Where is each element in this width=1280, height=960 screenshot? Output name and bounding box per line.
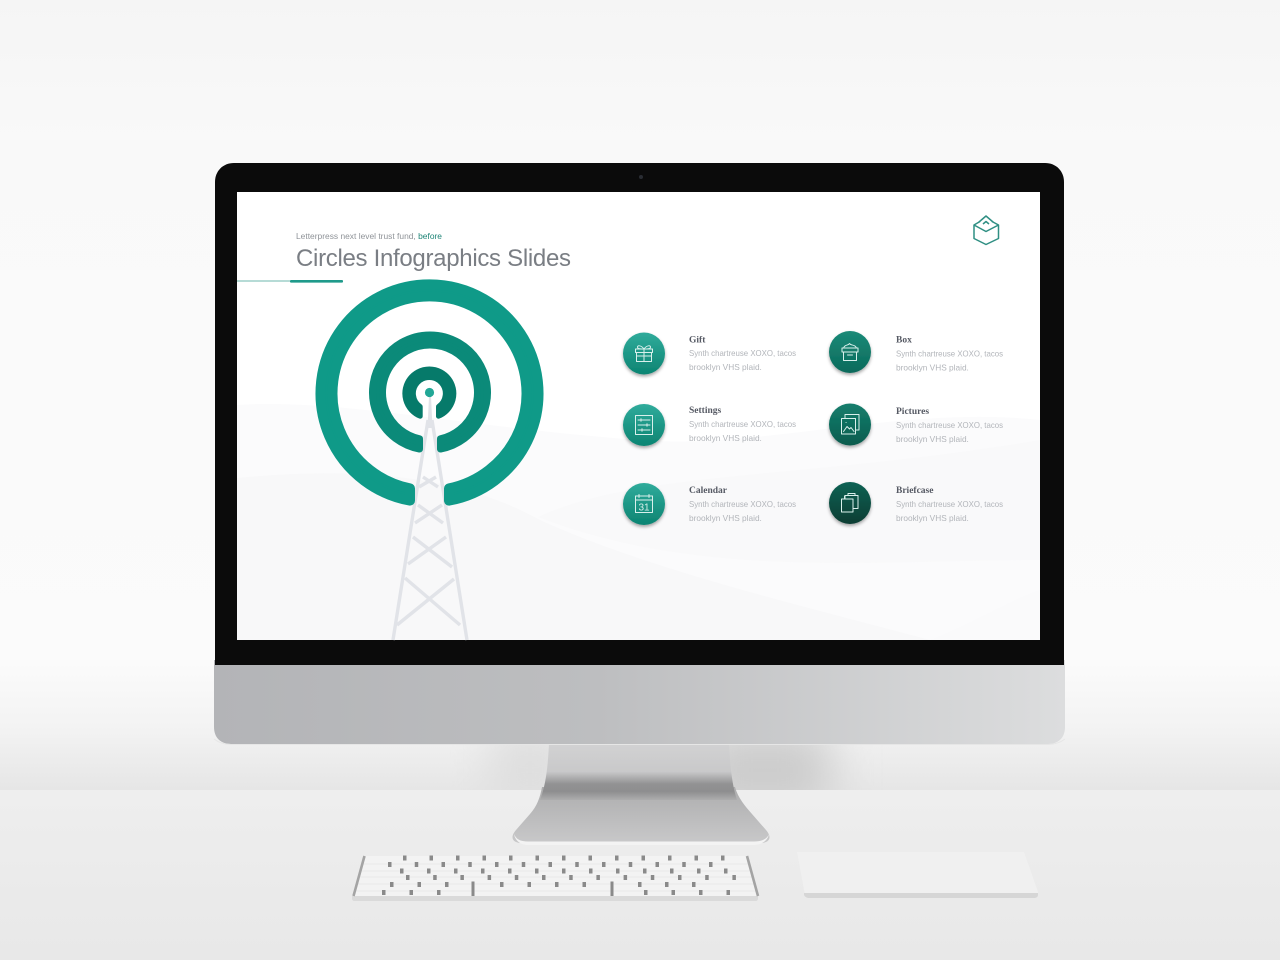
title underline — [237, 280, 343, 283]
settings description: Synth chartreuse XOXO, tacos — [689, 419, 796, 429]
pictures badge — [829, 404, 871, 446]
tower — [393, 396, 467, 640]
calendar description: Synth chartreuse XOXO, tacos — [689, 499, 796, 509]
calendar badge: 31 — [638, 502, 650, 514]
gift label: Gift — [689, 336, 706, 346]
item: box — [829, 331, 1003, 373]
soft wave background — [237, 404, 1040, 640]
outer ring — [320, 284, 538, 501]
shadow cast on the wall behind the stand — [496, 745, 843, 790]
desk surface — [0, 790, 1280, 960]
logo: cube icon — [974, 216, 998, 244]
briefcase badge — [829, 482, 871, 524]
silver chin — [214, 660, 1065, 744]
gift description: Synth chartreuse XOXO, tacos — [689, 348, 796, 358]
gift badge — [623, 332, 665, 374]
pictures description: Synth chartreuse XOXO, tacos — [896, 420, 1003, 430]
stand rim — [514, 834, 769, 845]
calendar description: brooklyn VHS plaid. — [689, 513, 762, 523]
black bezel — [215, 163, 1064, 665]
item: pictures — [829, 404, 1003, 446]
item: settings — [623, 404, 796, 446]
title: Circles Infographics Slides — [296, 245, 571, 272]
settings description: brooklyn VHS plaid. — [689, 433, 762, 443]
trackpad — [797, 852, 1038, 898]
box description: Synth chartreuse XOXO, tacos — [896, 348, 1003, 358]
monitor stand — [513, 743, 769, 845]
signal rings — [320, 284, 538, 501]
calendar badge — [623, 483, 665, 525]
webcam — [639, 175, 643, 179]
stand neck — [540, 743, 737, 800]
item: calendar — [623, 483, 796, 525]
calendar label: Calendar — [689, 486, 728, 496]
slide screen — [237, 192, 1040, 640]
settings label: Settings — [689, 406, 722, 416]
center dot — [425, 388, 434, 397]
inner ring — [405, 369, 454, 416]
subtitle: Letterpress next level trust fund, before — [296, 231, 442, 241]
keyboard — [352, 856, 758, 901]
stand base — [513, 787, 769, 843]
box description: brooklyn VHS plaid. — [896, 362, 969, 372]
briefcase description: brooklyn VHS plaid. — [896, 513, 969, 523]
pictures label: Pictures — [896, 407, 929, 417]
box badge — [829, 331, 871, 373]
pictures description: brooklyn VHS plaid. — [896, 434, 969, 444]
middle ring — [372, 335, 488, 449]
briefcase description: Synth chartreuse XOXO, tacos — [896, 499, 1003, 509]
box label: Box — [896, 336, 912, 346]
monitor body — [214, 163, 1065, 744]
item: gift — [623, 332, 796, 374]
settings badge — [623, 404, 665, 446]
gift description: brooklyn VHS plaid. — [689, 362, 762, 372]
item: briefcase — [829, 482, 1003, 524]
briefcase label: Briefcase — [896, 486, 933, 496]
